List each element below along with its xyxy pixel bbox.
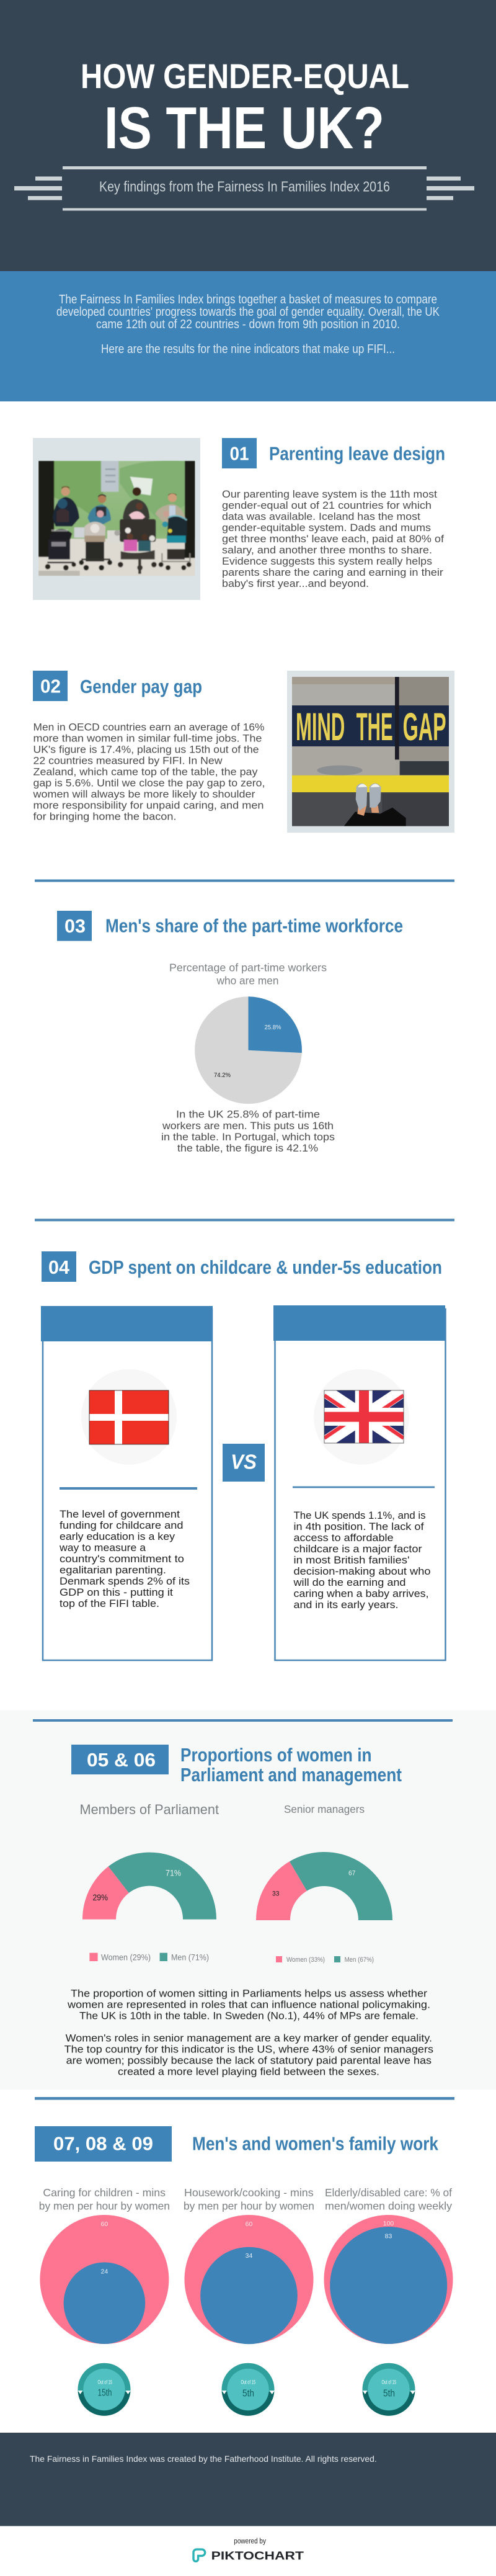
legend [276, 1956, 374, 1964]
text block: parliament and managers: The UK is 10th in the table. In Sweden (No.1), 44% of MPs are female. [79, 2010, 418, 2022]
text block: UK: will do the earning and [293, 1576, 405, 1588]
panel: 03 part-time workforce [35, 880, 454, 1221]
title [81, 56, 409, 161]
heading: proportions of women [180, 1744, 402, 1786]
text block: pay gap: for bringing home the bacon. [33, 810, 176, 822]
VS badge: VS [231, 1451, 257, 1473]
intro panel [0, 271, 496, 401]
rank badge 5th elderly care: Out of 15 [382, 2379, 396, 2386]
badge 02: 02 [40, 675, 61, 697]
chart: elderly care: 83 [385, 2232, 392, 2240]
text block: parenting leave: gender-equal out of 21 countries for which [222, 499, 432, 511]
text block: parenting leave: Our parenting leave system is the 11th most [222, 488, 437, 500]
chart: housework: by men per hour by women [184, 2200, 314, 2212]
text block: pay gap: more responsibility for unpaid caring, and men [33, 799, 264, 811]
text block: parenting leave: salary, and another three months to share. [222, 544, 432, 556]
text block: Denmark: top of the FIFI table. [60, 1598, 159, 1609]
rank badge 5th elderly care [362, 2363, 415, 2416]
photo: fathers with strollers [33, 438, 200, 600]
text block: parliament and managers [64, 1988, 433, 2078]
rank badge 5th housework: 5th [242, 2389, 254, 2399]
heading: men's share: Men's share of the part-time workforce [105, 915, 403, 937]
text block: Denmark: country's commitment to [60, 1553, 184, 1565]
stroller 2 [84, 522, 105, 537]
badge 07, 08 & 09: 07, 08 & 09 [53, 2133, 153, 2155]
text block: parliament and managers: Women's roles in senior management are a key marker of gender equality. [66, 2033, 432, 2044]
text block: parliament and managers: The top country for this indicator is the US, where 43% of senior managers [64, 2044, 433, 2055]
text block: part-time [161, 1109, 335, 1154]
footer panel [0, 2433, 496, 2526]
badge 03: 03 [64, 915, 86, 937]
text block: parenting leave: parents share the caring and earning in their [222, 566, 443, 578]
men [61, 487, 70, 496]
text block: part-time: the table, the figure is 42.1% [177, 1142, 318, 1154]
chart: housework: 60 [246, 2220, 252, 2228]
legend: Men (71%) [171, 1952, 209, 1962]
rank badge 15th: Out of 15 [98, 2379, 112, 2386]
chart: senior managers [256, 1803, 392, 1964]
heading: gender pay gap: Gender pay gap [80, 676, 202, 697]
chart title [169, 962, 327, 987]
pie chart: 74.2% [214, 1072, 231, 1079]
text block: UK: childcare is a major factor [294, 1543, 422, 1555]
badge 03 [57, 911, 92, 941]
legend: Men (67%) [345, 1956, 374, 1964]
text block: Denmark: way to measure a [59, 1542, 146, 1554]
text block: part-time: workers are men. This puts us 16th [162, 1120, 334, 1132]
chart: caring for children: Caring for children - mins [43, 2186, 166, 2199]
panel: 07 08 09 family work [35, 2097, 454, 2416]
stroller 4 [167, 516, 187, 537]
chart title: Percentage of part-time workers [169, 962, 327, 974]
text block: parliament and managers: women are represented in roles that can influence national policymaking. [67, 1999, 430, 2011]
text block: UK [293, 1509, 430, 1611]
badge 05 & 06: 05 & 06 [87, 1749, 156, 1771]
text block: UK: decision-making about who [294, 1565, 430, 1577]
panel: 04 GDP on childcare [41, 1251, 445, 1660]
icon: UK flag [324, 1390, 404, 1443]
text block: pay gap [32, 721, 265, 822]
card: UK [273, 1305, 445, 1660]
chart: caring for children [39, 2186, 170, 2344]
text block: parliament and managers: created a more level playing field between the sexes. [118, 2066, 379, 2078]
rank badge 5th elderly care: 5th [383, 2389, 395, 2399]
icon: Denmark flag [89, 1390, 169, 1444]
text block: parliament and managers: are women; possibly because the lack of statutory paid parental leave has [66, 2055, 432, 2067]
chart: elderly care [324, 2186, 453, 2344]
text block: UK: The UK spends 1.1%, and is [294, 1509, 425, 1521]
intro panel: developed countries' progress towards the goal of gender equality. Overall, the UK [56, 305, 440, 319]
chart: members of parliament: Members of Parliament [79, 1802, 219, 1817]
text block: part-time: in the table. In Portugal, which tops [161, 1131, 335, 1143]
panel: 05 and 06 women in parliament and management [0, 1711, 496, 2090]
text block: Denmark: egalitarian parenting. [60, 1564, 166, 1576]
title: IS THE UK? [104, 95, 384, 161]
chart: elderly care: men/women doing weekly [325, 2200, 452, 2212]
card: Denmark [41, 1306, 213, 1660]
chart title: who are men [216, 975, 279, 987]
text block: parliament and managers: The proportion of women sitting in Parliaments helps us assess whether [71, 1988, 427, 2000]
legend: Women (33%) [286, 1956, 325, 1964]
heading: family work: Men's and women's family work [192, 2133, 439, 2155]
chart: housework: Housework/cooking - mins [184, 2186, 314, 2199]
text block: UK: caring when a baby arrives, [294, 1588, 429, 1599]
text block: UK: in 4th position. The lack of [294, 1521, 424, 1532]
text block: Denmark: funding for childcare and [60, 1519, 184, 1531]
badge 04: 04 [48, 1256, 70, 1278]
chart: members of parliament: 29% [93, 1892, 108, 1902]
badge 01 [222, 438, 257, 468]
text block: pay gap: gap is 5.6%. Until we close the pay gap to zero, [33, 777, 265, 789]
chart: housework [184, 2186, 314, 2344]
photo: mind the gap: MIND [296, 705, 345, 749]
legend [89, 1952, 209, 1962]
stroller 3 double [120, 519, 156, 542]
text block: pay gap: UK's figure is 17.4%, placing us 15th out of the [33, 743, 259, 755]
stroller 1 [50, 529, 72, 540]
heading: GDP: GDP spent on childcare & under-5s education [89, 1256, 442, 1278]
badge 04 [42, 1251, 76, 1282]
text block: Denmark: Denmark spends 2% of its [60, 1575, 190, 1587]
footer panel: The Fairness in Families Index was created by the Fatherhood Institute. All rights reserved. [30, 2454, 377, 2464]
chart: caring for children: 24 [101, 2268, 108, 2275]
badge 05 & 06 [71, 1745, 169, 1774]
text block: parenting leave: data was available. Iceland has the most [222, 511, 420, 522]
text block: parenting leave: Evidence suggests this system really helps [222, 555, 432, 567]
chart: elderly care: 100 [383, 2220, 394, 2227]
text block: UK: in most British families' [294, 1554, 409, 1566]
intro panel: came 12th out of 22 countries - down from 9th position in 2010. [96, 318, 400, 331]
chart: members of parliament: 71% [166, 1867, 181, 1877]
text block: Denmark [59, 1508, 190, 1609]
heading: proportions of women: Proportions of women in [180, 1744, 372, 1766]
rank badge 5th housework: Out of 15 [241, 2379, 255, 2386]
text block: parenting leave: baby's first year...and beyond. [222, 578, 369, 589]
panel: 02 gender pay gap [32, 671, 454, 833]
text block: pay gap: women will always be more likely to shoulder [32, 788, 255, 800]
text block: Denmark: early education is a key [60, 1531, 175, 1542]
chart: elderly care: Elderly/disabled care: % of [325, 2186, 452, 2199]
chart: senior managers: Senior managers [284, 1803, 365, 1815]
text block: pay gap: Men in OECD countries earn an average of 16% [33, 721, 264, 733]
VS badge [223, 1444, 265, 1482]
legend: Women (29%) [101, 1952, 151, 1962]
subtitle ribbon: Key findings from the Fairness In Families Index 2016 [99, 179, 390, 195]
text block: Denmark: The level of government [60, 1508, 180, 1520]
intro panel: Here are the results for the nine indicators that make up FIFI... [101, 342, 395, 356]
chart: caring for children: by men per hour by women [39, 2200, 170, 2212]
badge 02 [33, 671, 68, 701]
heading: proportions of women: Parliament and management [180, 1764, 402, 1786]
badge 07, 08 & 09 [35, 2126, 172, 2162]
text block: Denmark: GDP on this - putting it [60, 1586, 173, 1598]
subtitle ribbon [14, 166, 474, 211]
text block: UK: and in its early years. [294, 1599, 398, 1611]
photo: mind the gap [287, 671, 454, 833]
chart: housework: 34 [246, 2252, 252, 2260]
panel: 01 parenting leave design [33, 438, 445, 600]
text block: UK: access to affordable [294, 1532, 393, 1544]
icon: piktochart logo [193, 2549, 205, 2561]
rank badge 15th: 15th [98, 2388, 112, 2399]
heading: parenting leave design: Parenting leave design [269, 443, 445, 465]
text block: part-time: In the UK 25.8% of part-time [176, 1109, 320, 1120]
chart: senior managers: 67 [348, 1870, 356, 1877]
piktochart credit: powered by [234, 2538, 266, 2546]
intro panel: The Fairness In Families Index brings together a basket of measures to compare [59, 293, 437, 306]
photo: mind the gap: THE [356, 705, 393, 749]
header panel [0, 0, 496, 271]
rank badge 5th housework [222, 2363, 275, 2416]
text block: pay gap: Zealand, which came top of the table, the pay [33, 766, 258, 777]
text block: parenting leave: gender-equitable system. Dads and mums [222, 522, 431, 534]
title: HOW GENDER-EQUAL [81, 56, 409, 96]
piktochart credit [193, 2538, 304, 2562]
chart: senior managers: 33 [272, 1890, 279, 1898]
pie chart [195, 996, 302, 1104]
text block: pay gap: 22 countries measured by FIFI. In New [33, 754, 223, 766]
badge 01: 01 [229, 443, 249, 464]
pie chart: 25.8% [264, 1024, 281, 1031]
piktochart credit: PIKTOCHART [211, 2549, 304, 2562]
rank badge 15th [78, 2363, 131, 2416]
chart: members of parliament [79, 1802, 219, 1962]
text block: parenting leave [222, 488, 444, 589]
babies carried [58, 499, 68, 509]
text block: pay gap: more than women in similar full-time jobs. The [33, 732, 262, 744]
text block: parenting leave: get three months' leave each, paid at 80% of [222, 533, 444, 545]
chart: caring for children: 60 [101, 2220, 108, 2228]
